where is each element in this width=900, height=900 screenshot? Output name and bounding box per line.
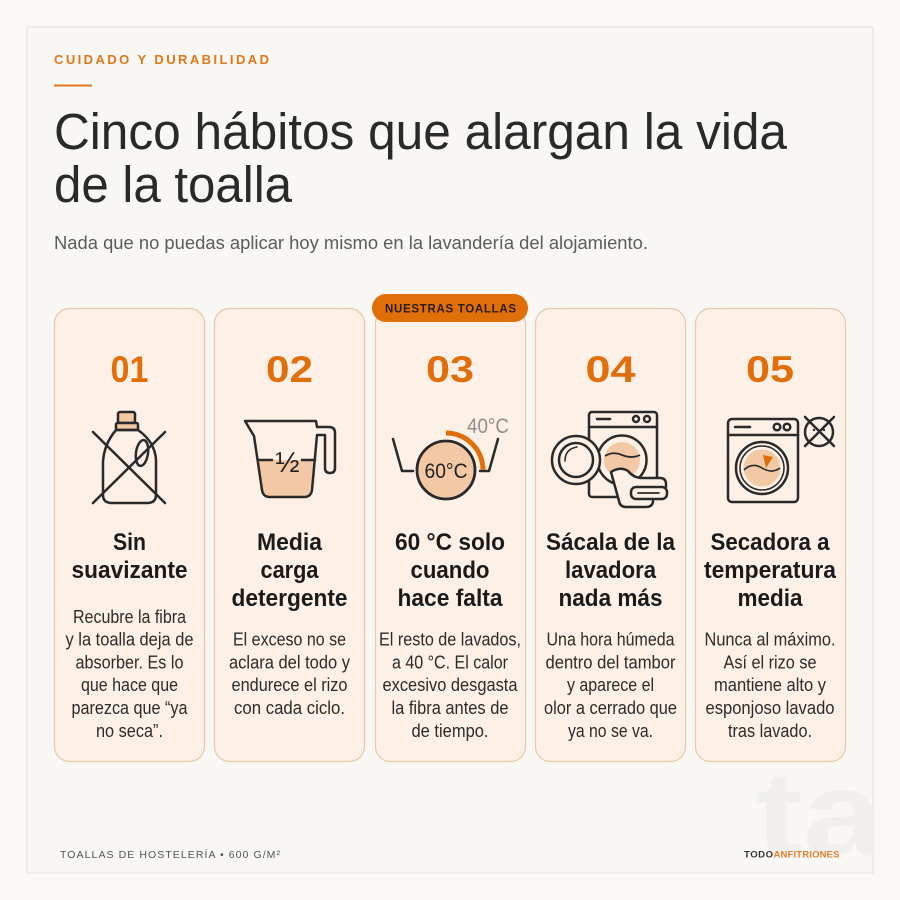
body text: parezca que “ya (72, 698, 188, 718)
body text (704, 630, 836, 741)
badge: nuestras toallas (372, 294, 528, 322)
body text: a 40 °C. El calor (392, 652, 508, 672)
body text: aclara del todo y (229, 652, 350, 672)
panel: habit 03 (372, 294, 528, 762)
title: de la toalla (54, 156, 293, 213)
icon: softener bottle crossed out (93, 412, 165, 503)
footer brand: ANFITRIONES (774, 850, 840, 860)
panel: habit 04: nada más (558, 585, 662, 612)
footer brand (744, 850, 840, 860)
icon: wash tub 60 to 40 degrees (393, 415, 509, 499)
title (54, 103, 788, 213)
body text: Así el rizo se (724, 652, 816, 672)
panel: habit 03: hace falta (398, 585, 503, 612)
panel: habit 04 (536, 308, 686, 762)
body text (379, 630, 521, 741)
number 04: 04 (586, 349, 636, 390)
body text: excesivo desgasta (382, 675, 518, 695)
body text: tras lavado. (728, 721, 812, 741)
panel: habit 05: media (738, 585, 803, 612)
body text: Nunca al máximo. (704, 630, 836, 650)
body text: de tiempo. (412, 721, 488, 741)
heading: Sin (113, 529, 146, 556)
number 03: 03 (426, 349, 474, 390)
body text: y aparece el (567, 675, 654, 695)
body text: esponjoso lavado (706, 698, 834, 718)
subtitle: Nada que no puedas aplicar hoy mismo en la lavandería del alojamiento. (54, 233, 648, 253)
panel: habit 05: temperatura (704, 557, 837, 584)
icon: measuring jug half full: ½ (275, 447, 300, 479)
badge: nuestras toallas: NUESTRAS TOALLAS (385, 304, 516, 316)
icon: wash tub 60 to 40 degrees: 40°C (467, 415, 509, 438)
title: Cinco hábitos que alargan la vida (54, 103, 788, 160)
panel: habit 03: cuando (410, 557, 490, 584)
heading: Sácala de la (546, 529, 676, 556)
body text: con cada ciclo. (234, 698, 345, 718)
body text: El resto de lavados, (379, 630, 521, 650)
body text: la fibra antes de (392, 698, 508, 718)
number 01: 01 (110, 349, 148, 390)
icon: dryer at medium temperature (728, 417, 834, 502)
panel: habit 01: suavizante (72, 557, 188, 584)
eyebrow: CUIDADO Y DURABILIDAD (54, 52, 269, 67)
number 05: 05 (746, 349, 794, 390)
panel: habit 02: carga (260, 557, 319, 584)
icon: washing machine with towel (552, 412, 667, 507)
body text: ya no se va. (568, 721, 653, 741)
body text: y la toalla deja de (66, 630, 194, 650)
body text: olor a cerrado que (544, 698, 677, 718)
body text: dentro del tambor (546, 652, 676, 672)
body text (66, 607, 194, 741)
heading: 60 °C solo (395, 529, 505, 556)
icon: measuring jug half full (245, 421, 335, 497)
number 02: 02 (266, 349, 313, 390)
body text: absorber. Es lo (76, 652, 184, 672)
heading: Media (257, 529, 323, 556)
heading: Secadora a (710, 529, 830, 556)
panel: habit 04: lavadora (565, 557, 657, 584)
body text: que hace que (81, 675, 178, 695)
body text (544, 630, 677, 741)
body text: endurece el rizo (232, 675, 348, 695)
panel: habit 02 (214, 308, 364, 762)
panel: habit 02: detergente (232, 585, 348, 612)
body text: Una hora húmeda (546, 630, 675, 650)
panel: habit 05 (696, 308, 846, 762)
watermark logo: ta (755, 747, 885, 881)
body text (229, 630, 350, 718)
body text: El exceso no se (233, 630, 346, 650)
footer brand: TODO (744, 850, 773, 860)
accent rule (54, 84, 92, 86)
footer note: TOALLAS DE HOSTELERÍA • 600 G/M² (60, 848, 280, 861)
body text: Recubre la fibra (73, 607, 187, 627)
body text: no seca”. (96, 721, 163, 741)
body text: mantiene alto y (714, 675, 826, 695)
panel: habit 01 (54, 308, 204, 762)
icon: wash tub 60 to 40 degrees: 60°C (424, 460, 468, 483)
